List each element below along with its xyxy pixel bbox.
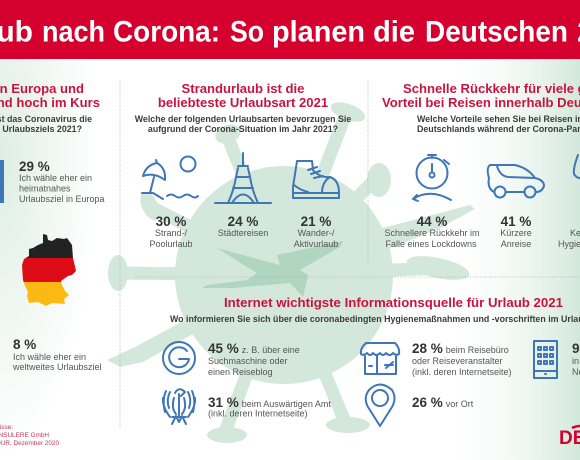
stat 30 percent: 30 % bbox=[156, 214, 186, 229]
stat 8 percent: Ich wähle eher ein bbox=[13, 352, 86, 362]
bar bbox=[0, 160, 4, 203]
stat 31 percent: 31 % beim Auswärtigen Amt bbox=[208, 395, 331, 410]
stat 21 percent: Aktivurlaub bbox=[294, 239, 338, 249]
stat 28 percent: 28 % beim Reisebüro bbox=[412, 341, 509, 356]
icon: droplet bbox=[574, 155, 580, 178]
stat 44 percent: Schnellere Rückkehr im bbox=[384, 228, 480, 238]
stat 41 percent: 41 % bbox=[501, 214, 531, 229]
heading: Internet wichtigste Informationsquelle für Urlaub 2021 bbox=[224, 295, 563, 310]
stat 26 percent: 26 % vor Ort bbox=[412, 395, 474, 410]
stat 45 percent: 45 % z. B. über eine bbox=[208, 341, 300, 356]
title bbox=[0, 16, 580, 48]
stat 29 percent: Ich wähle eher ein bbox=[19, 173, 92, 183]
heading: beliebteste Urlaubsart 2021 bbox=[158, 95, 328, 110]
title: So bbox=[230, 16, 264, 48]
stat 30 percent: Strand-/ bbox=[155, 228, 188, 238]
stat 29 percent: 29 % bbox=[19, 159, 50, 174]
stat 44 percent: 44 % bbox=[417, 214, 447, 229]
panel: Europe and Germany bbox=[0, 81, 105, 447]
title: Deutschen bbox=[425, 16, 568, 48]
stat 45 percent bbox=[208, 341, 300, 377]
stat 45 percent: Suchmaschine oder bbox=[208, 356, 288, 366]
stat 28 percent bbox=[412, 341, 512, 377]
stat 21 percent: 21 % bbox=[301, 214, 331, 229]
stat 29 percent: Urlaubsziel in Europa bbox=[19, 194, 105, 204]
map of Germany bbox=[22, 234, 76, 306]
stat 24 percent: 24 % bbox=[228, 214, 258, 229]
stat 24 percent: Städtereisen bbox=[218, 228, 268, 238]
icon: location pin bbox=[366, 384, 394, 426]
airplane silhouette bbox=[107, 205, 475, 367]
title banner bbox=[0, 0, 580, 59]
stat 28 percent: (inkl. deren Internetseite) bbox=[412, 367, 512, 377]
stat 30 percent bbox=[149, 214, 193, 249]
question: aufgrund der Corona-Situation im Jahr 2021? bbox=[148, 124, 338, 134]
stat 41 percent bbox=[500, 214, 532, 249]
icon: Eiffel tower bbox=[215, 153, 271, 203]
question: Welche der folgenden Urlaubsarten bevorzugen Sie bbox=[135, 114, 351, 124]
panel: information sources bbox=[163, 295, 580, 426]
stat 30 percent: Poolurlaub bbox=[149, 239, 193, 249]
stat 9 percent: in bbox=[572, 356, 579, 366]
panel: quick return bbox=[382, 81, 580, 249]
icon: federal eagle bbox=[163, 389, 195, 424]
icon: stopwatch bbox=[413, 155, 451, 201]
stat 29 percent: heimatnahes bbox=[19, 184, 71, 194]
icon: travel shop bbox=[361, 343, 399, 374]
stat 31 percent bbox=[208, 395, 331, 418]
stat 41 percent: Kürzere bbox=[500, 228, 532, 238]
title: planen bbox=[272, 16, 365, 48]
stat 21 percent bbox=[294, 214, 338, 249]
stat 29 percent bbox=[19, 159, 105, 204]
dividers bbox=[120, 80, 580, 430]
virus illustration bbox=[108, 98, 471, 443]
icon: tablet bbox=[534, 341, 557, 378]
stat 45 percent: einen Reiseblog bbox=[208, 367, 273, 377]
icon: G bbox=[163, 342, 195, 374]
title: die bbox=[373, 16, 415, 48]
icon: hiking boot bbox=[293, 161, 339, 198]
icon: car bbox=[488, 165, 544, 198]
panel: beach holiday bbox=[135, 81, 351, 249]
stat 44 percent: Falle eines Lockdowns bbox=[385, 239, 477, 249]
stat 44 percent bbox=[384, 214, 480, 249]
icon: beach bbox=[142, 156, 198, 199]
stat 31 percent: (inkl. deren Internetseite) bbox=[208, 408, 308, 418]
stat 21 percent: Wander-/ bbox=[298, 228, 335, 238]
stat 8 percent: 8 % bbox=[13, 337, 36, 352]
stat 9 percent bbox=[572, 341, 580, 377]
title: nach bbox=[42, 16, 105, 48]
title: Corona: bbox=[113, 16, 220, 48]
stat 24 percent bbox=[218, 214, 268, 238]
stat 28 percent: oder Reiseveranstalter bbox=[412, 356, 503, 366]
heading: Strandurlaub ist die bbox=[182, 81, 304, 96]
stat 8 percent: weltweites Urlaubsziel bbox=[12, 362, 102, 372]
stat 41 percent: Anreise bbox=[501, 239, 531, 249]
stat 8 percent bbox=[12, 337, 102, 372]
